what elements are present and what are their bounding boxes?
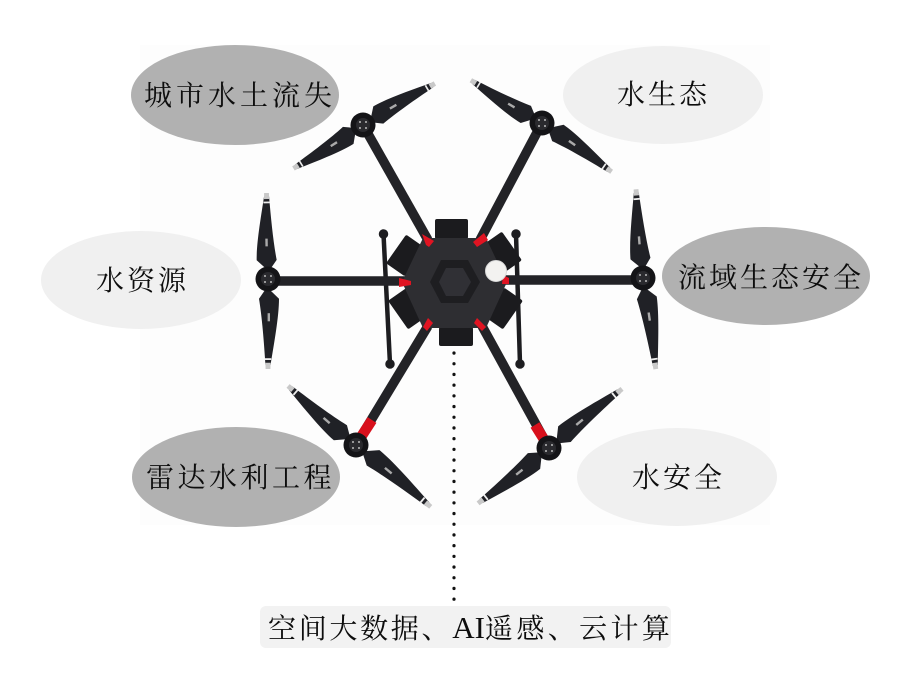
motors [256, 110, 656, 460]
landing gear [381, 232, 522, 366]
dotted connector line [452, 353, 456, 602]
red arm collars [361, 420, 545, 441]
ellipse: 水安全 [577, 428, 777, 526]
battery packs [386, 219, 523, 346]
central hexagon [430, 260, 480, 303]
hexagonal body [402, 238, 507, 328]
white GPS dome [486, 260, 506, 282]
arms [268, 123, 643, 448]
drone [256, 73, 667, 514]
ellipse: 雷达水利工程 [132, 427, 340, 527]
propeller blades [256, 73, 667, 514]
ellipse: 水生态 [563, 46, 763, 144]
red connectors [399, 233, 509, 331]
ellipse: 流域生态安全 [662, 227, 870, 325]
ellipse: 水资源 [41, 231, 241, 329]
ellipse: 城市水土流失: 城市水土流失 [144, 80, 336, 112]
ellipse: 水资源: 水资源 [96, 265, 189, 297]
ellipse: 雷达水利工程: 雷达水利工程 [146, 462, 335, 494]
ellipse: 流域生态安全: 流域生态安全 [678, 262, 864, 294]
bottom caption: 空间大数据、AI遥感、云计算 [268, 610, 673, 645]
ellipse: 水安全: 水安全 [632, 462, 725, 494]
ellipse: 水生态: 水生态 [617, 79, 710, 111]
ellipse: 城市水土流失 [131, 45, 339, 145]
